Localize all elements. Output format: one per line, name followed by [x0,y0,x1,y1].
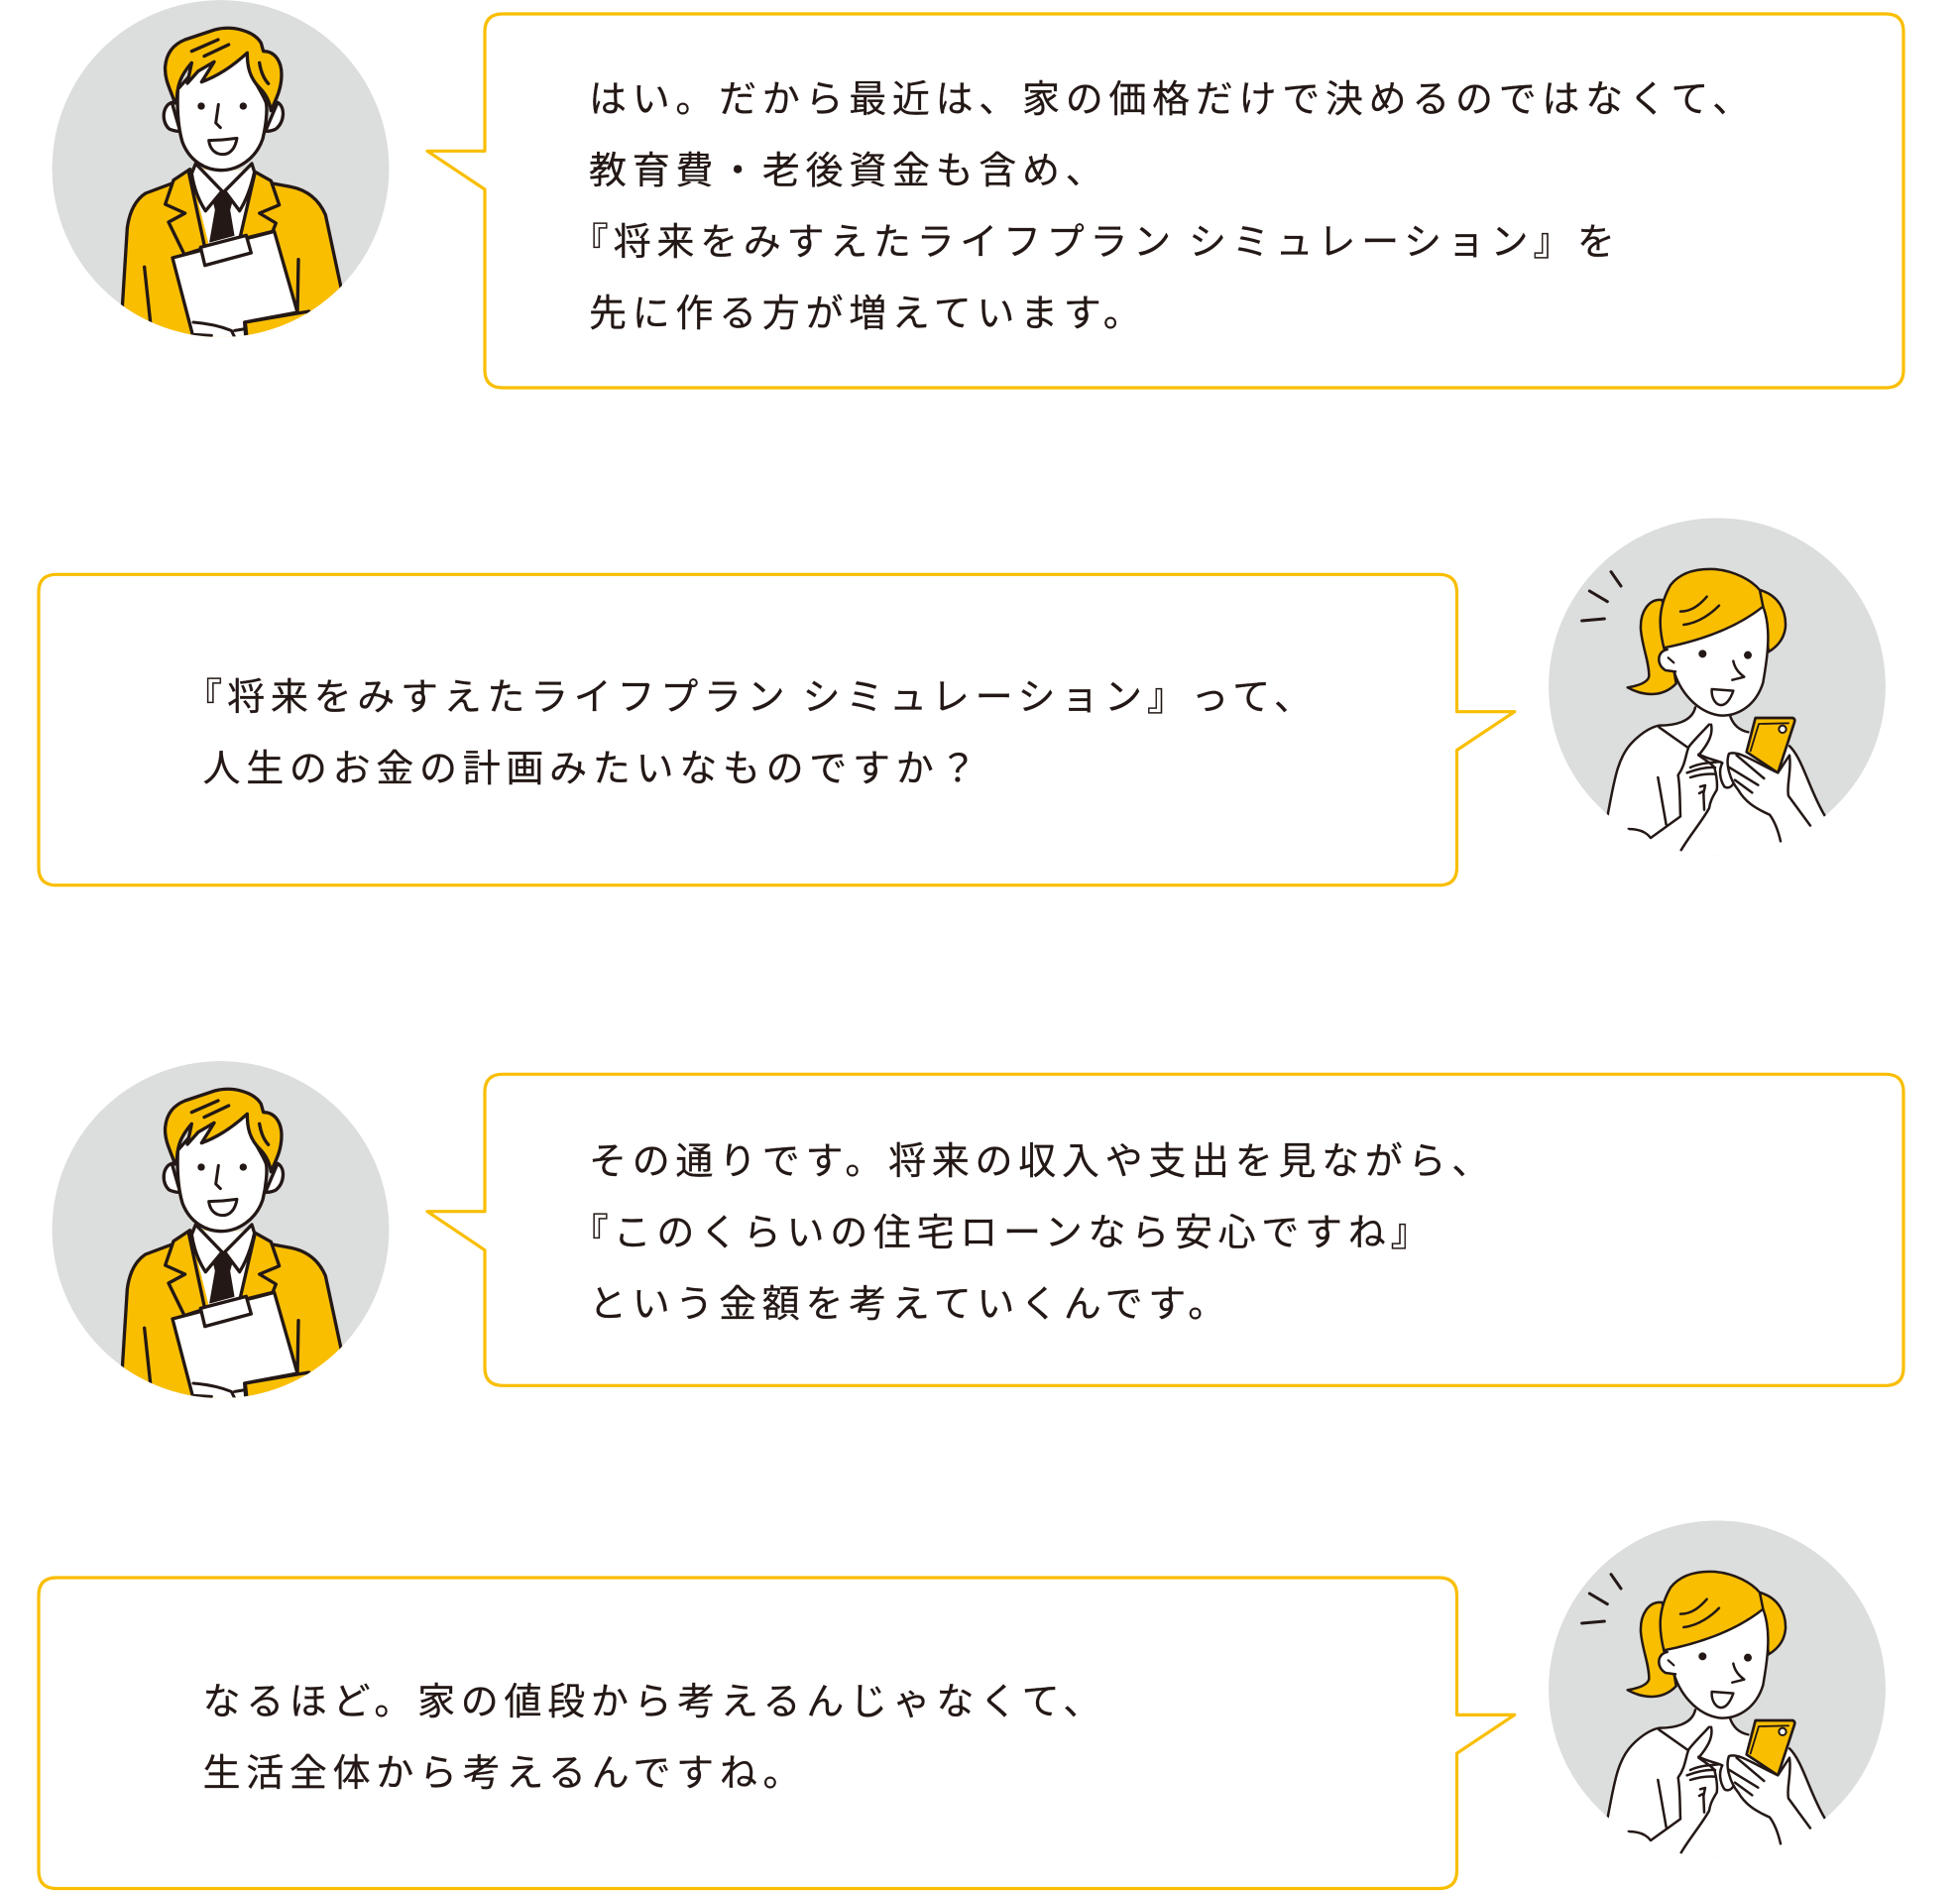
icon: consultant man avatar 1 [52,0,389,337]
icon: woman with smartphone avatar 1 [1549,518,1886,851]
text: bubble 3 message: その通りです。将来の収入や支出を見ながら、 『このくらいの住宅ローンなら安心ですね』 という金額を考えていくんです。 [589,1141,1495,1326]
icon: woman with smartphone avatar 2 [1549,1521,1886,1854]
panel: speech bubble 3 [425,1073,1905,1387]
icon: consultant man avatar 2 [52,1061,389,1398]
text: bubble 4 message: なるほど。家の値段から考えるんじゃなくて、 生活全体から考えるんですね。 [202,1682,1106,1795]
panel: speech bubble 2 [37,573,1517,886]
panel: speech bubble 4 [37,1576,1517,1890]
text: bubble 1 message: はい。だから最近は、家の価格だけで決めるのではなくて、 教育費・老後資金も含め、 『将来をみすえたライフプラン シミュレーション』 を 先に作る方が増えています。 [589,79,1756,335]
text: bubble 2 message: 『将来をみすえたライフプラン シミュレーション』 って、 人生のお金の計画みたいなものですか？ [202,677,1318,790]
panel: speech bubble 1 [425,12,1905,390]
